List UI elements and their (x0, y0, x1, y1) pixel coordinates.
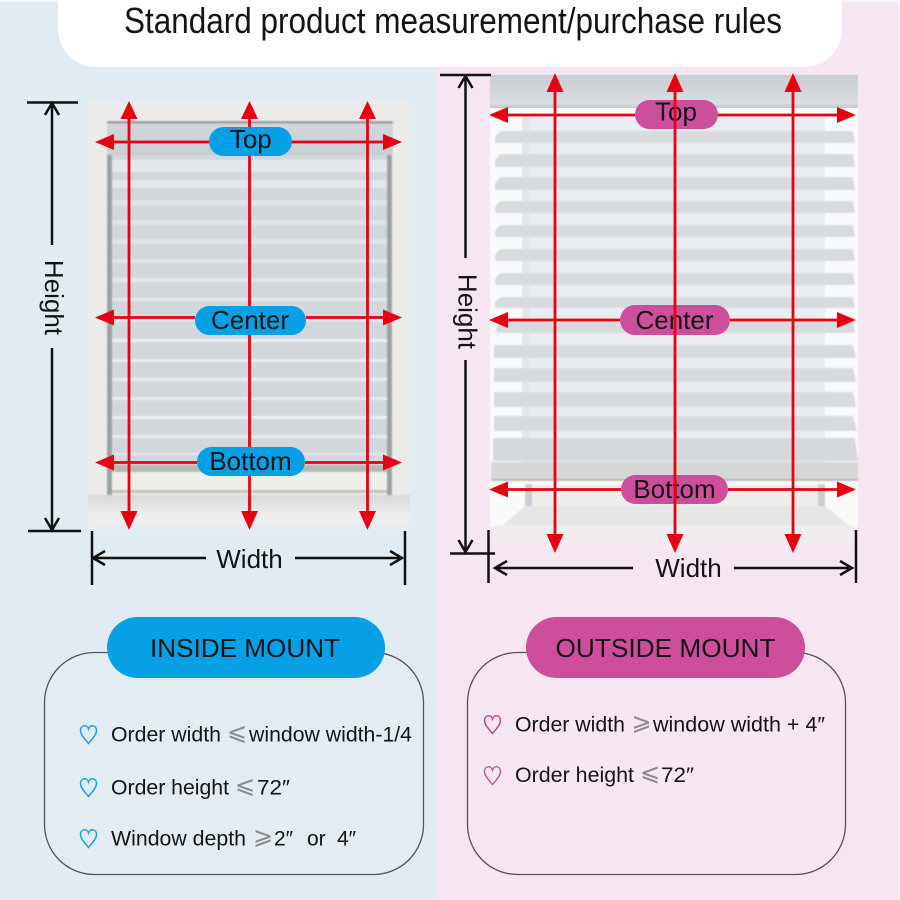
heading pill: inside mount (107, 617, 385, 678)
rule: order height (111, 772, 291, 800)
rule: order width: window width-1/4 (248, 724, 412, 746)
title: Standard product measurement/purchase rules (124, 0, 782, 41)
dimension: height (outside) (440, 75, 495, 554)
rule: order width: window width + 4″ (652, 714, 826, 736)
red measurement arrows: outside mount (489, 73, 856, 553)
rule: order height: 72″ (661, 764, 695, 787)
dimension: width (outside): Width (655, 553, 722, 583)
rule: order width (111, 719, 412, 746)
dimension: height (inside) (27, 102, 81, 531)
icon: heart (484, 716, 500, 734)
title banner (58, 0, 842, 67)
image: inside mount window with blind (88, 102, 410, 530)
panel: outside mount rules (468, 617, 846, 874)
panel: outside mount background (437, 0, 900, 900)
heading pill: inside mount: INSIDE MOUNT (150, 633, 340, 663)
icon: heart (484, 767, 500, 784)
dimension: height (outside): Height (452, 274, 482, 350)
dimension: width (outside) (488, 530, 856, 583)
rule: window depth (111, 823, 357, 850)
image: outside mount blind (490, 75, 858, 550)
pill: bottom (inside): Bottom (209, 446, 292, 476)
heading pill: outside mount: OUTSIDE MOUNT (556, 633, 776, 663)
rule: window depth: 4″ (337, 828, 357, 850)
rule: order height: Order height (111, 776, 229, 800)
dimension: width (inside) (92, 531, 405, 585)
pill: top (inside) (209, 124, 292, 156)
rule: order height: ⩽ (235, 772, 255, 799)
pill: bottom (outside): Bottom (633, 474, 716, 504)
dimension: height (inside): Height (39, 260, 69, 336)
rule: order width: Order width (111, 724, 221, 746)
rule: order height: ⩽ (640, 760, 660, 786)
pill: center (outside): Center (635, 305, 714, 335)
rule: window depth: 2″ (274, 828, 294, 850)
pill: top (outside) (635, 96, 718, 129)
icon: heart (80, 726, 96, 744)
pill: top (inside): Top (230, 124, 272, 154)
panel: inside mount background (0, 0, 437, 900)
rule: order height (515, 760, 695, 787)
rule: window depth: ⩾ (253, 823, 273, 850)
rule: window depth: or (307, 828, 326, 850)
heading pill: outside mount (526, 617, 805, 678)
rule: order width: Order width (515, 714, 625, 736)
rule: order width (515, 709, 826, 736)
panel: inside mount rules (44, 617, 424, 874)
icon: heart (80, 779, 96, 796)
pill: center (inside): Center (211, 305, 289, 335)
icon: heart (80, 830, 96, 848)
rule: order width: ⩽ (227, 719, 247, 746)
pill: top (outside): Top (655, 96, 697, 126)
rule: order width: ⩾ (632, 709, 652, 736)
red measurement arrows: inside mount (95, 101, 402, 530)
rule: order height: 72″ (257, 776, 291, 800)
dimension: width (inside): Width (216, 544, 283, 574)
rule: window depth: Window depth (111, 828, 246, 850)
rule: order height: Order height (515, 764, 634, 787)
